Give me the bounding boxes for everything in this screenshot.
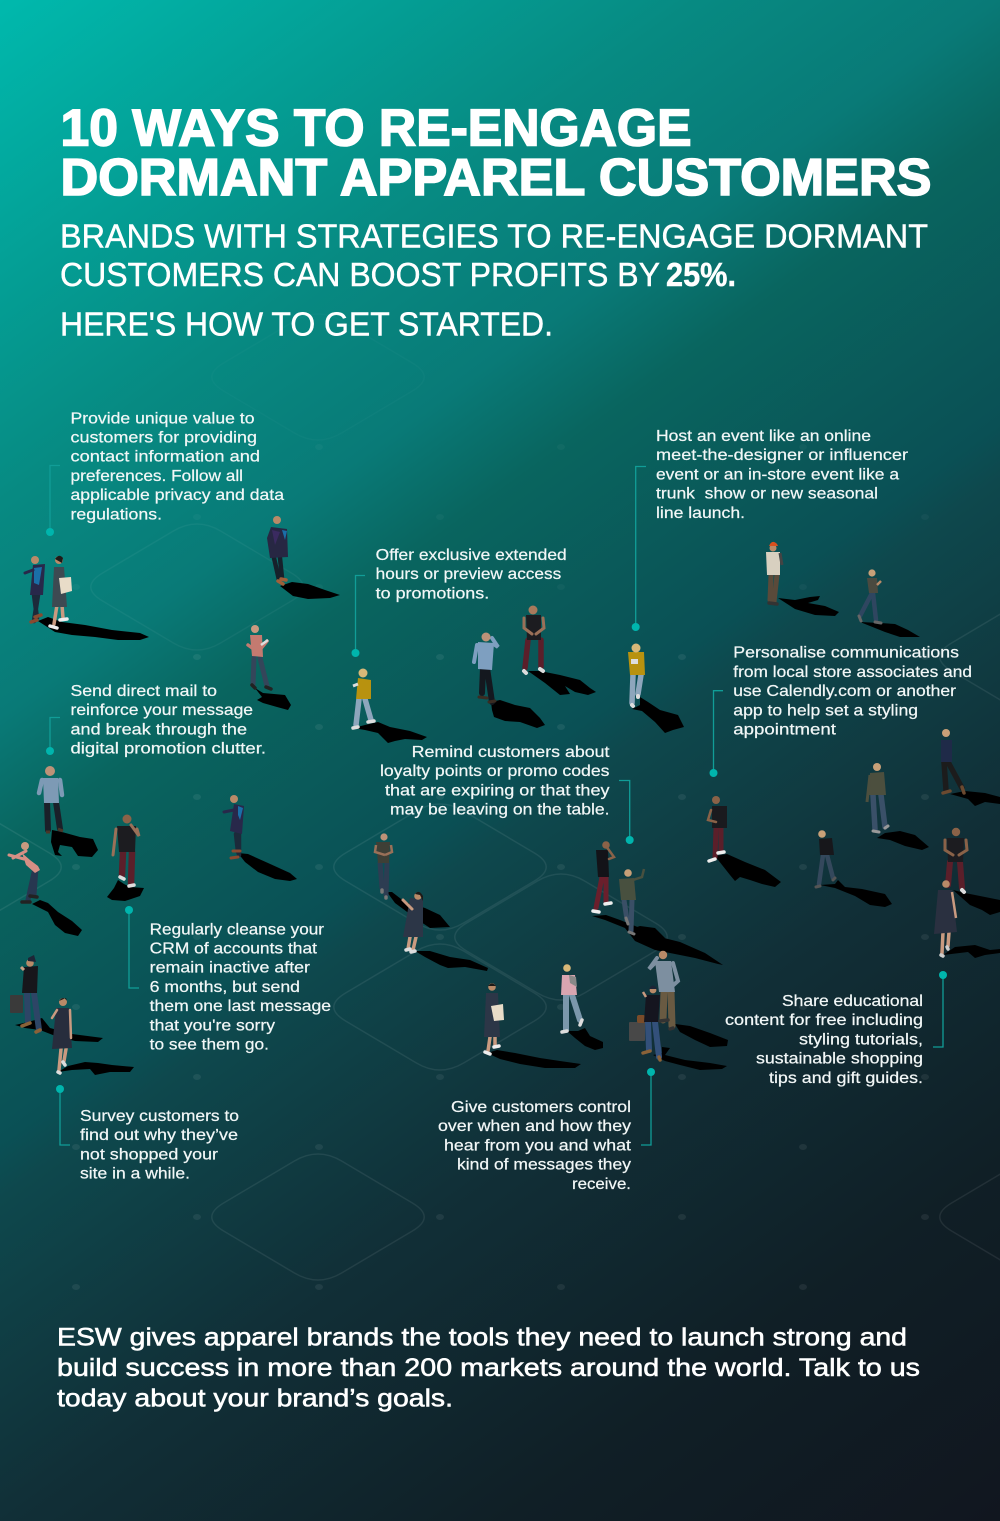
person: woman bending xyxy=(9,842,82,936)
connector 9 xyxy=(641,1068,655,1145)
tip 4: host an event: Host an event like an online xyxy=(656,428,871,445)
person: woman with tote, centre bottom xyxy=(484,983,581,1068)
person: woman in dress, centre xyxy=(403,892,488,971)
tip 5: personalise: appointment xyxy=(733,722,837,739)
tip 10: educational content: content for free including xyxy=(725,1012,923,1029)
tip 9: customer control: Give customers control xyxy=(451,1099,631,1116)
tip 5: personalise: use Calendly.com or another xyxy=(733,683,957,700)
title: DORMANT APPAREL CUSTOMERS xyxy=(60,149,932,207)
person: man in navy jacket xyxy=(267,516,340,599)
person: man in orange hat xyxy=(766,542,839,616)
tip 7: cleanse CRM: remain inactive after xyxy=(150,960,311,977)
tip 3: exclusive hours: Offer exclusive extended xyxy=(376,547,567,564)
person: man with phone and woman with tote xyxy=(25,556,149,640)
connector 7 xyxy=(125,906,139,988)
closing statement: today about your brand’s goals. xyxy=(57,1385,453,1413)
tip 7: cleanse CRM: them one last message xyxy=(150,998,331,1015)
tip 9: customer control xyxy=(438,1099,632,1193)
tip 4: host an event xyxy=(656,428,909,522)
tip 5: personalise: from local store associates and xyxy=(733,664,972,681)
connector 5 xyxy=(710,691,723,777)
tip 2: direct mail: Send direct mail to xyxy=(70,683,217,700)
tip 6: loyalty points: may be leaving on the table. xyxy=(390,802,610,819)
tip 10: educational content: Share educational xyxy=(782,993,923,1010)
person: woman in navy top xyxy=(941,729,1000,806)
person: woman in dark dress xyxy=(52,998,134,1075)
subtitle: BRANDS WITH STRATEGIES TO RE-ENGAGE DORMANT xyxy=(60,218,928,254)
tip 3: exclusive hours: to promotions. xyxy=(376,585,489,602)
person: woman in beanie with suitcase xyxy=(629,986,727,1070)
tip 2: direct mail: reinforce your message xyxy=(70,702,253,719)
tip 8: survey xyxy=(80,1108,239,1183)
tip 7: cleanse CRM: that you're sorry xyxy=(150,1017,275,1034)
tip 4: host an event: meet-the-designer or influencer xyxy=(656,447,909,464)
connector 2 xyxy=(46,718,60,755)
subtitle: HERE'S HOW TO GET STARTED. xyxy=(60,306,553,342)
tip 2: direct mail xyxy=(70,683,266,758)
person: man with maroon trousers xyxy=(107,814,144,901)
tip 6: loyalty points: loyalty points or promo codes xyxy=(380,763,610,780)
tip 5: personalise xyxy=(733,645,972,739)
person: woman in olive top, centre xyxy=(375,833,450,928)
person: man in light blue shirt xyxy=(39,766,98,857)
person: woman from behind in olive xyxy=(867,763,929,850)
connector 1 xyxy=(46,466,60,536)
person: man in black top xyxy=(524,606,596,695)
person: man in black top, right xyxy=(945,828,1000,915)
tip 3: exclusive hours: hours or preview access xyxy=(376,566,561,583)
person: man in maroon track pants xyxy=(708,796,781,887)
connector 6 xyxy=(619,780,634,844)
person: woman in black top xyxy=(816,830,892,907)
tip 9: customer control: kind of messages they xyxy=(457,1157,631,1174)
tip 6: loyalty points: that are expiring or that they xyxy=(385,782,610,799)
tip 2: direct mail: digital promotion clutter. xyxy=(70,741,266,758)
person: woman walking with phone xyxy=(859,569,920,637)
subtitle: CUSTOMERS CAN BOOST PROFITS BY xyxy=(60,256,660,293)
person: blonde woman in yellow xyxy=(353,668,427,743)
tip 1: unique value: applicable privacy and data xyxy=(70,487,284,504)
person: blonde woman with tablet xyxy=(628,644,684,733)
tip 7: cleanse CRM: CRM of accounts that xyxy=(150,940,318,958)
connector 8 xyxy=(56,1085,70,1145)
closing statement xyxy=(57,1324,920,1413)
person: man on phone in blue shirt xyxy=(474,632,545,728)
tip 4: host an event: trunk show or new seasonal xyxy=(656,486,878,503)
tip 3: exclusive hours xyxy=(376,547,567,602)
tip 8: survey: site in a while. xyxy=(80,1166,190,1183)
person: woman in pink top xyxy=(561,964,603,1050)
title: 10 WAYS TO RE-ENGAGE xyxy=(60,100,692,158)
tip 10: educational content: styling tutorials, xyxy=(799,1031,923,1048)
tip 8: survey: find out why they’ve xyxy=(80,1127,238,1144)
connector 10 xyxy=(933,971,947,1047)
tip 9: customer control: over when and how they xyxy=(438,1118,631,1135)
tip 1: unique value: preferences. Follow all xyxy=(70,468,243,485)
subtitle xyxy=(60,218,928,342)
tip 7: cleanse CRM: to see them go. xyxy=(150,1037,269,1054)
person: woman in dress, right xyxy=(934,880,1000,958)
tip 7: cleanse CRM: Regularly cleanse your xyxy=(150,921,325,938)
tip 7: cleanse CRM: 6 months, but send xyxy=(150,979,300,996)
tip 7: cleanse CRM xyxy=(150,921,331,1054)
person: woman with suitcase xyxy=(10,955,103,1042)
tip 10: educational content: sustainable shopping xyxy=(756,1051,923,1068)
tip 9: customer control: receive. xyxy=(572,1176,631,1193)
connector 4 xyxy=(632,466,646,631)
person: man and woman taking selfie xyxy=(592,841,723,965)
person: man with phone xyxy=(224,795,297,881)
tip 1: unique value: customers for providing xyxy=(70,430,257,446)
tip 10: educational content xyxy=(725,993,923,1087)
tip 6: loyalty points xyxy=(380,744,610,819)
tip 8: survey: not shopped your xyxy=(80,1146,219,1163)
tip 4: host an event: line launch. xyxy=(656,505,745,522)
tip 5: personalise: Personalise communications xyxy=(733,645,959,662)
closing statement: ESW gives apparel brands the tools they need to launch strong and xyxy=(57,1324,907,1352)
tip 1: unique value: Provide unique value to xyxy=(70,410,255,427)
tip 1: unique value: contact information and xyxy=(70,449,260,466)
title xyxy=(60,100,932,207)
tip 2: direct mail: and break through the xyxy=(70,721,247,738)
tip 1: unique value: regulations. xyxy=(70,506,162,523)
closing statement: build success in more than 200 markets around the world. Talk to us xyxy=(57,1354,920,1382)
person: woman in pink shirt xyxy=(248,625,291,710)
tip 6: loyalty points: Remind customers about xyxy=(412,744,610,761)
tip 8: survey: Survey customers to xyxy=(80,1108,239,1125)
tip 10: educational content: tips and gift guides. xyxy=(769,1070,923,1087)
tip 5: personalise: app to help set a styling xyxy=(733,702,918,719)
subtitle: 25%. xyxy=(666,256,736,293)
tip 9: customer control: hear from you and what xyxy=(444,1137,632,1154)
person: man in grey top xyxy=(649,951,728,1047)
tip 4: host an event: event or an in-store event like a xyxy=(656,466,899,483)
connector 3 xyxy=(352,576,365,657)
tip 1: unique value xyxy=(70,410,284,523)
